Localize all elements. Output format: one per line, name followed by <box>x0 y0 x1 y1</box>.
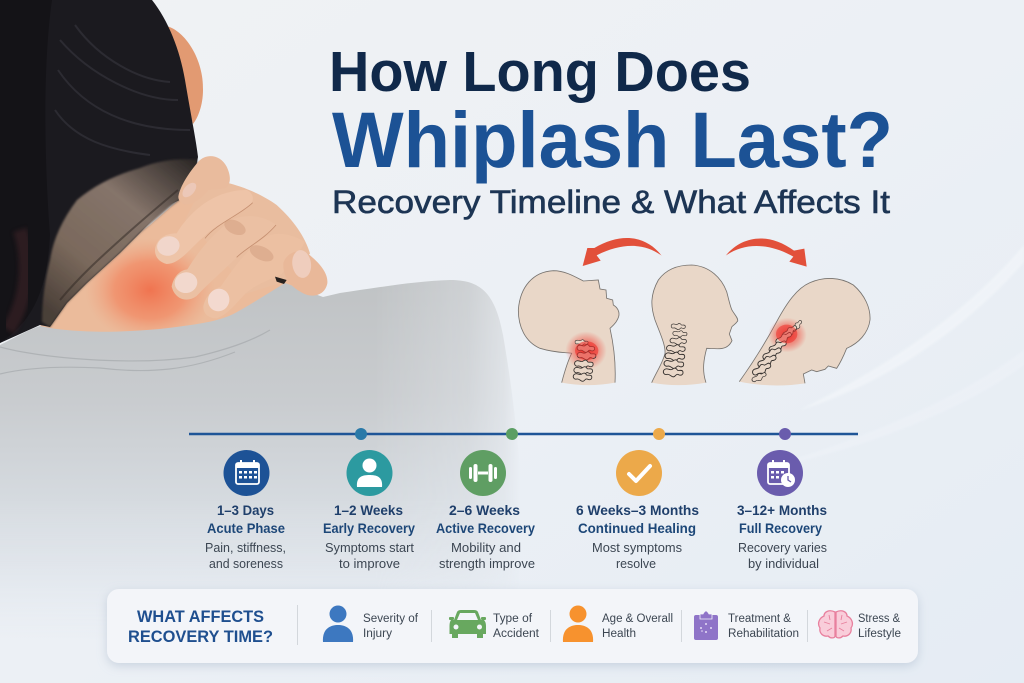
panel heading <box>128 608 273 646</box>
photo: shirt collar seams <box>0 330 270 374</box>
stage: 6 weeks-3 months: Continued Healing <box>578 520 696 536</box>
hand: third finger <box>172 216 276 300</box>
arrow: forward <box>726 238 807 267</box>
hand: second finger <box>155 190 253 264</box>
icon: check <box>616 450 662 496</box>
panel heading: RECOVERY TIME? <box>128 628 273 646</box>
stage: 6 weeks-3 months: 6 Weeks–3 Months <box>576 502 699 518</box>
icon: orange person <box>563 606 593 642</box>
timeline <box>189 428 858 571</box>
stage: 1-3 days: 1–3 Days <box>217 502 274 518</box>
stage: 3-12+ months <box>737 450 827 571</box>
factor: treatment and rehabilitation: Rehabilitation <box>728 628 799 640</box>
stage: 1-3 days <box>205 450 286 571</box>
timeline line <box>189 433 858 435</box>
arrow: backward <box>583 238 662 266</box>
panel heading: WHAT AFFECTS <box>137 608 264 626</box>
subtitle: Recovery Timeline & What Affects It <box>332 184 890 220</box>
icon: dumbbell <box>460 450 506 496</box>
hand: fourth finger <box>203 234 305 318</box>
title line 2: Whiplash Last? <box>332 95 893 184</box>
icon: green car <box>449 610 486 638</box>
stage: 3-12+ months: Recovery varies <box>738 541 827 555</box>
hand: top finger <box>178 156 230 204</box>
stage: 6 weeks-3 months: resolve <box>616 557 656 571</box>
stage: 3-12+ months: Full Recovery <box>739 520 822 536</box>
stage: 1-2 weeks <box>323 450 415 571</box>
stage: 2-6 weeks: strength improve <box>439 557 535 571</box>
head: neutral <box>652 265 738 385</box>
whiplash neck diagram <box>518 238 870 385</box>
head: extended backward <box>518 271 619 385</box>
stage: 6 weeks-3 months: Most symptoms <box>592 541 682 555</box>
stage: 6 weeks-3 months <box>576 450 699 571</box>
stage: 3-12+ months: by individual <box>748 557 819 571</box>
stage: 2-6 weeks: 2–6 Weeks <box>449 502 520 518</box>
icon: calendar with clock <box>757 450 803 496</box>
stage: 1-2 weeks: 1–2 Weeks <box>334 502 403 518</box>
factor: severity of injury: Severity of <box>363 613 419 625</box>
stage: 2-6 weeks: Active Recovery <box>436 520 535 536</box>
photo: ear <box>166 26 203 124</box>
title <box>329 40 893 220</box>
icon: blue person <box>323 606 353 642</box>
factor: treatment and rehabilitation <box>694 611 799 640</box>
factor: stress and lifestyle: Lifestyle <box>858 628 901 640</box>
photo: woman holding her neck <box>0 0 520 683</box>
timeline dots <box>355 428 791 440</box>
title line 1: How Long Does <box>329 40 751 104</box>
factor: type of accident: Accident <box>493 628 540 640</box>
stage: 1-2 weeks: to improve <box>339 557 400 571</box>
factor: severity of injury: Injury <box>363 628 392 640</box>
stage: 1-2 weeks: Symptoms start <box>325 541 415 555</box>
hand: back of hand <box>185 183 310 294</box>
photo: pain glow <box>85 238 215 342</box>
stage: 2-6 weeks <box>436 450 535 571</box>
factor: stress and lifestyle <box>819 611 901 640</box>
head: flexed forward <box>739 278 870 385</box>
hand: little finger tip <box>283 249 327 296</box>
photo: hair <box>0 0 198 343</box>
factor: age and overall health: Health <box>602 628 636 640</box>
icon: brain <box>819 611 852 638</box>
factor: severity of injury <box>323 606 419 642</box>
stage: 2-6 weeks: Mobility and <box>451 541 521 555</box>
photo: shirt <box>0 280 510 588</box>
stage: 1-3 days: Acute Phase <box>207 520 285 536</box>
icon: calendar <box>224 450 270 496</box>
icon: person <box>346 450 392 496</box>
icon: clipboard <box>694 611 718 640</box>
factor: treatment and rehabilitation: Treatment & <box>728 613 791 625</box>
photo: neck skin <box>38 190 300 335</box>
stage: 1-3 days: Pain, stiffness, <box>205 541 286 555</box>
photo: hand <box>155 156 327 318</box>
stage: 1-3 days: and soreness <box>209 557 283 571</box>
factor: age and overall health: Age & Overall <box>602 613 673 625</box>
hand: gap shadow <box>275 277 287 284</box>
factor: age and overall health <box>563 606 673 642</box>
hand: finger creases <box>205 203 276 257</box>
factor: type of accident: Type of <box>493 613 533 625</box>
factor: type of accident <box>449 610 540 640</box>
stage: 1-2 weeks: Early Recovery <box>323 520 415 536</box>
factor: stress and lifestyle: Stress & <box>858 613 900 625</box>
panel: what affects recovery time <box>107 589 918 663</box>
stage: 3-12+ months: 3–12+ Months <box>737 502 827 518</box>
